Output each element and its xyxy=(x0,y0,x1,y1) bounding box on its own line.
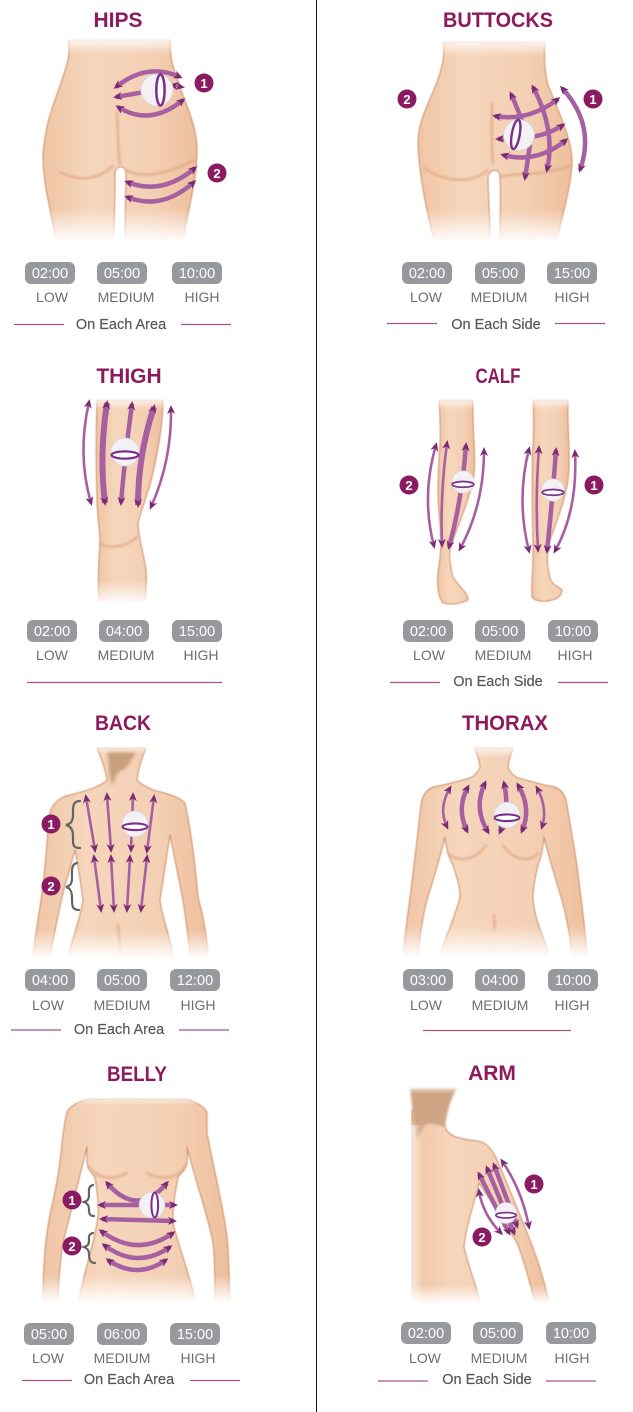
timers: HIGH xyxy=(184,647,218,663)
timers: 15:00 xyxy=(177,1327,213,1343)
illustration: hips xyxy=(40,36,200,242)
timers: HIGH xyxy=(180,1350,216,1366)
panel: arm xyxy=(378,1062,596,1388)
timers: 02:00 xyxy=(410,624,446,640)
note: On Each Area xyxy=(74,1022,165,1038)
badge 1 xyxy=(62,1190,82,1210)
timers: 02:00 xyxy=(34,624,70,640)
timers: HIGH xyxy=(184,289,220,305)
heading: back: BACK xyxy=(95,712,151,735)
rule xyxy=(27,682,222,684)
timers: 15:00 xyxy=(179,624,215,640)
timers xyxy=(403,620,598,663)
illustration: thorax xyxy=(395,744,595,957)
heading: calf: CALF xyxy=(476,365,521,388)
badge 2: 2 xyxy=(68,1239,76,1254)
timers: HIGH xyxy=(554,997,590,1013)
note: On Each Area xyxy=(84,1372,175,1388)
illustration: buttocks xyxy=(415,38,585,242)
timers: 02:00 xyxy=(408,1326,444,1342)
timers: 05:00 xyxy=(31,1327,67,1343)
badge 1: 1 xyxy=(589,92,597,107)
timers xyxy=(401,1322,596,1366)
timers: 03:00 xyxy=(410,973,446,989)
timers: HIGH xyxy=(554,1350,590,1366)
timers: LOW xyxy=(36,289,69,305)
panel: calf xyxy=(390,365,608,690)
note: On Each Area xyxy=(76,317,167,333)
badge 2 xyxy=(398,90,416,108)
badge 1 xyxy=(584,476,604,494)
badge 1 xyxy=(584,90,602,108)
timers xyxy=(403,969,598,1013)
brace 2 xyxy=(66,863,79,910)
timers: 05:00 xyxy=(104,973,140,989)
panel: thorax xyxy=(395,712,598,1030)
timers xyxy=(25,969,220,1013)
badge 2: 2 xyxy=(47,879,55,894)
timers xyxy=(402,262,597,305)
timers: LOW xyxy=(32,997,65,1013)
panel: buttocks xyxy=(387,9,605,333)
badge 1 xyxy=(524,1174,544,1194)
heading: thorax: THORAX xyxy=(462,712,548,735)
timers: MEDIUM xyxy=(475,647,531,663)
panel: thigh xyxy=(27,365,222,682)
timers: MEDIUM xyxy=(471,1350,527,1366)
illustration: left leg xyxy=(428,396,484,604)
brace 1 xyxy=(84,1185,94,1216)
timers: 10:00 xyxy=(555,624,591,640)
note: On Each Side xyxy=(442,1372,532,1388)
timers xyxy=(27,620,222,663)
timers: 06:00 xyxy=(104,1327,140,1343)
heading: hips: HIPS xyxy=(93,9,143,32)
badge 2: 2 xyxy=(403,92,411,107)
timers: 05:00 xyxy=(104,266,140,282)
timers: 10:00 xyxy=(179,266,215,282)
brace 1 xyxy=(66,801,80,848)
badge 2 xyxy=(400,476,418,494)
timers: MEDIUM xyxy=(94,1350,150,1366)
timers xyxy=(24,1323,220,1366)
timers: LOW xyxy=(32,1350,65,1366)
timers: LOW xyxy=(410,997,443,1013)
timers: 10:00 xyxy=(553,1326,589,1342)
panel: hips xyxy=(14,9,231,333)
heading: buttocks: BUTTOCKS xyxy=(443,9,553,32)
timers: 04:00 xyxy=(106,624,142,640)
rule xyxy=(423,1030,571,1032)
timers: 02:00 xyxy=(409,266,445,282)
timers: MEDIUM xyxy=(472,997,528,1013)
timers: 05:00 xyxy=(482,266,518,282)
badge 2 xyxy=(42,876,60,896)
timers: MEDIUM xyxy=(98,289,154,305)
badge 2 xyxy=(472,1228,492,1246)
heading: belly: BELLY xyxy=(107,1063,167,1086)
timers: LOW xyxy=(410,289,443,305)
timers: HIGH xyxy=(554,289,590,305)
badge 2: 2 xyxy=(213,166,221,181)
timers: LOW xyxy=(409,1350,442,1366)
timers: 05:00 xyxy=(482,624,518,640)
badge 1: 1 xyxy=(590,478,598,493)
timers: 04:00 xyxy=(32,973,68,989)
timers: MEDIUM xyxy=(98,647,154,663)
badge 1: 1 xyxy=(47,817,55,832)
note: On Each Side xyxy=(451,317,541,333)
badge 1 xyxy=(42,814,60,834)
illustration: thigh xyxy=(83,396,171,604)
center divider xyxy=(316,0,318,1412)
badge 2: 2 xyxy=(405,478,413,493)
timers: 02:00 xyxy=(32,266,68,282)
timers: LOW xyxy=(413,647,446,663)
illustration: arm xyxy=(405,1084,555,1305)
badge 2 xyxy=(208,164,226,182)
note: On Each Side xyxy=(453,674,543,690)
badge 1: 1 xyxy=(200,76,208,91)
timers: 10:00 xyxy=(555,973,591,989)
badge 1: 1 xyxy=(68,1193,76,1208)
timers: 12:00 xyxy=(177,973,213,989)
timers: 15:00 xyxy=(554,266,590,282)
illustration: belly xyxy=(36,1095,236,1302)
timers: MEDIUM xyxy=(471,289,527,305)
badge 1 xyxy=(194,74,214,92)
timers: HIGH xyxy=(558,647,592,663)
badge 2 xyxy=(62,1236,82,1256)
timers xyxy=(25,262,222,305)
panel: belly xyxy=(22,1063,240,1388)
illustration: right leg xyxy=(522,396,575,601)
timers: 04:00 xyxy=(482,973,518,989)
timers: MEDIUM xyxy=(94,997,150,1013)
heading: arm: ARM xyxy=(468,1062,516,1085)
brace 2 xyxy=(84,1233,95,1263)
panel: back xyxy=(11,712,229,1038)
illustration: back xyxy=(25,744,215,958)
timers: LOW xyxy=(36,647,69,663)
timers: HIGH xyxy=(180,997,216,1013)
badge 2: 2 xyxy=(478,1230,486,1245)
badge 1: 1 xyxy=(530,1177,538,1192)
timers: 05:00 xyxy=(480,1326,516,1342)
heading: thigh: THIGH xyxy=(96,365,162,388)
